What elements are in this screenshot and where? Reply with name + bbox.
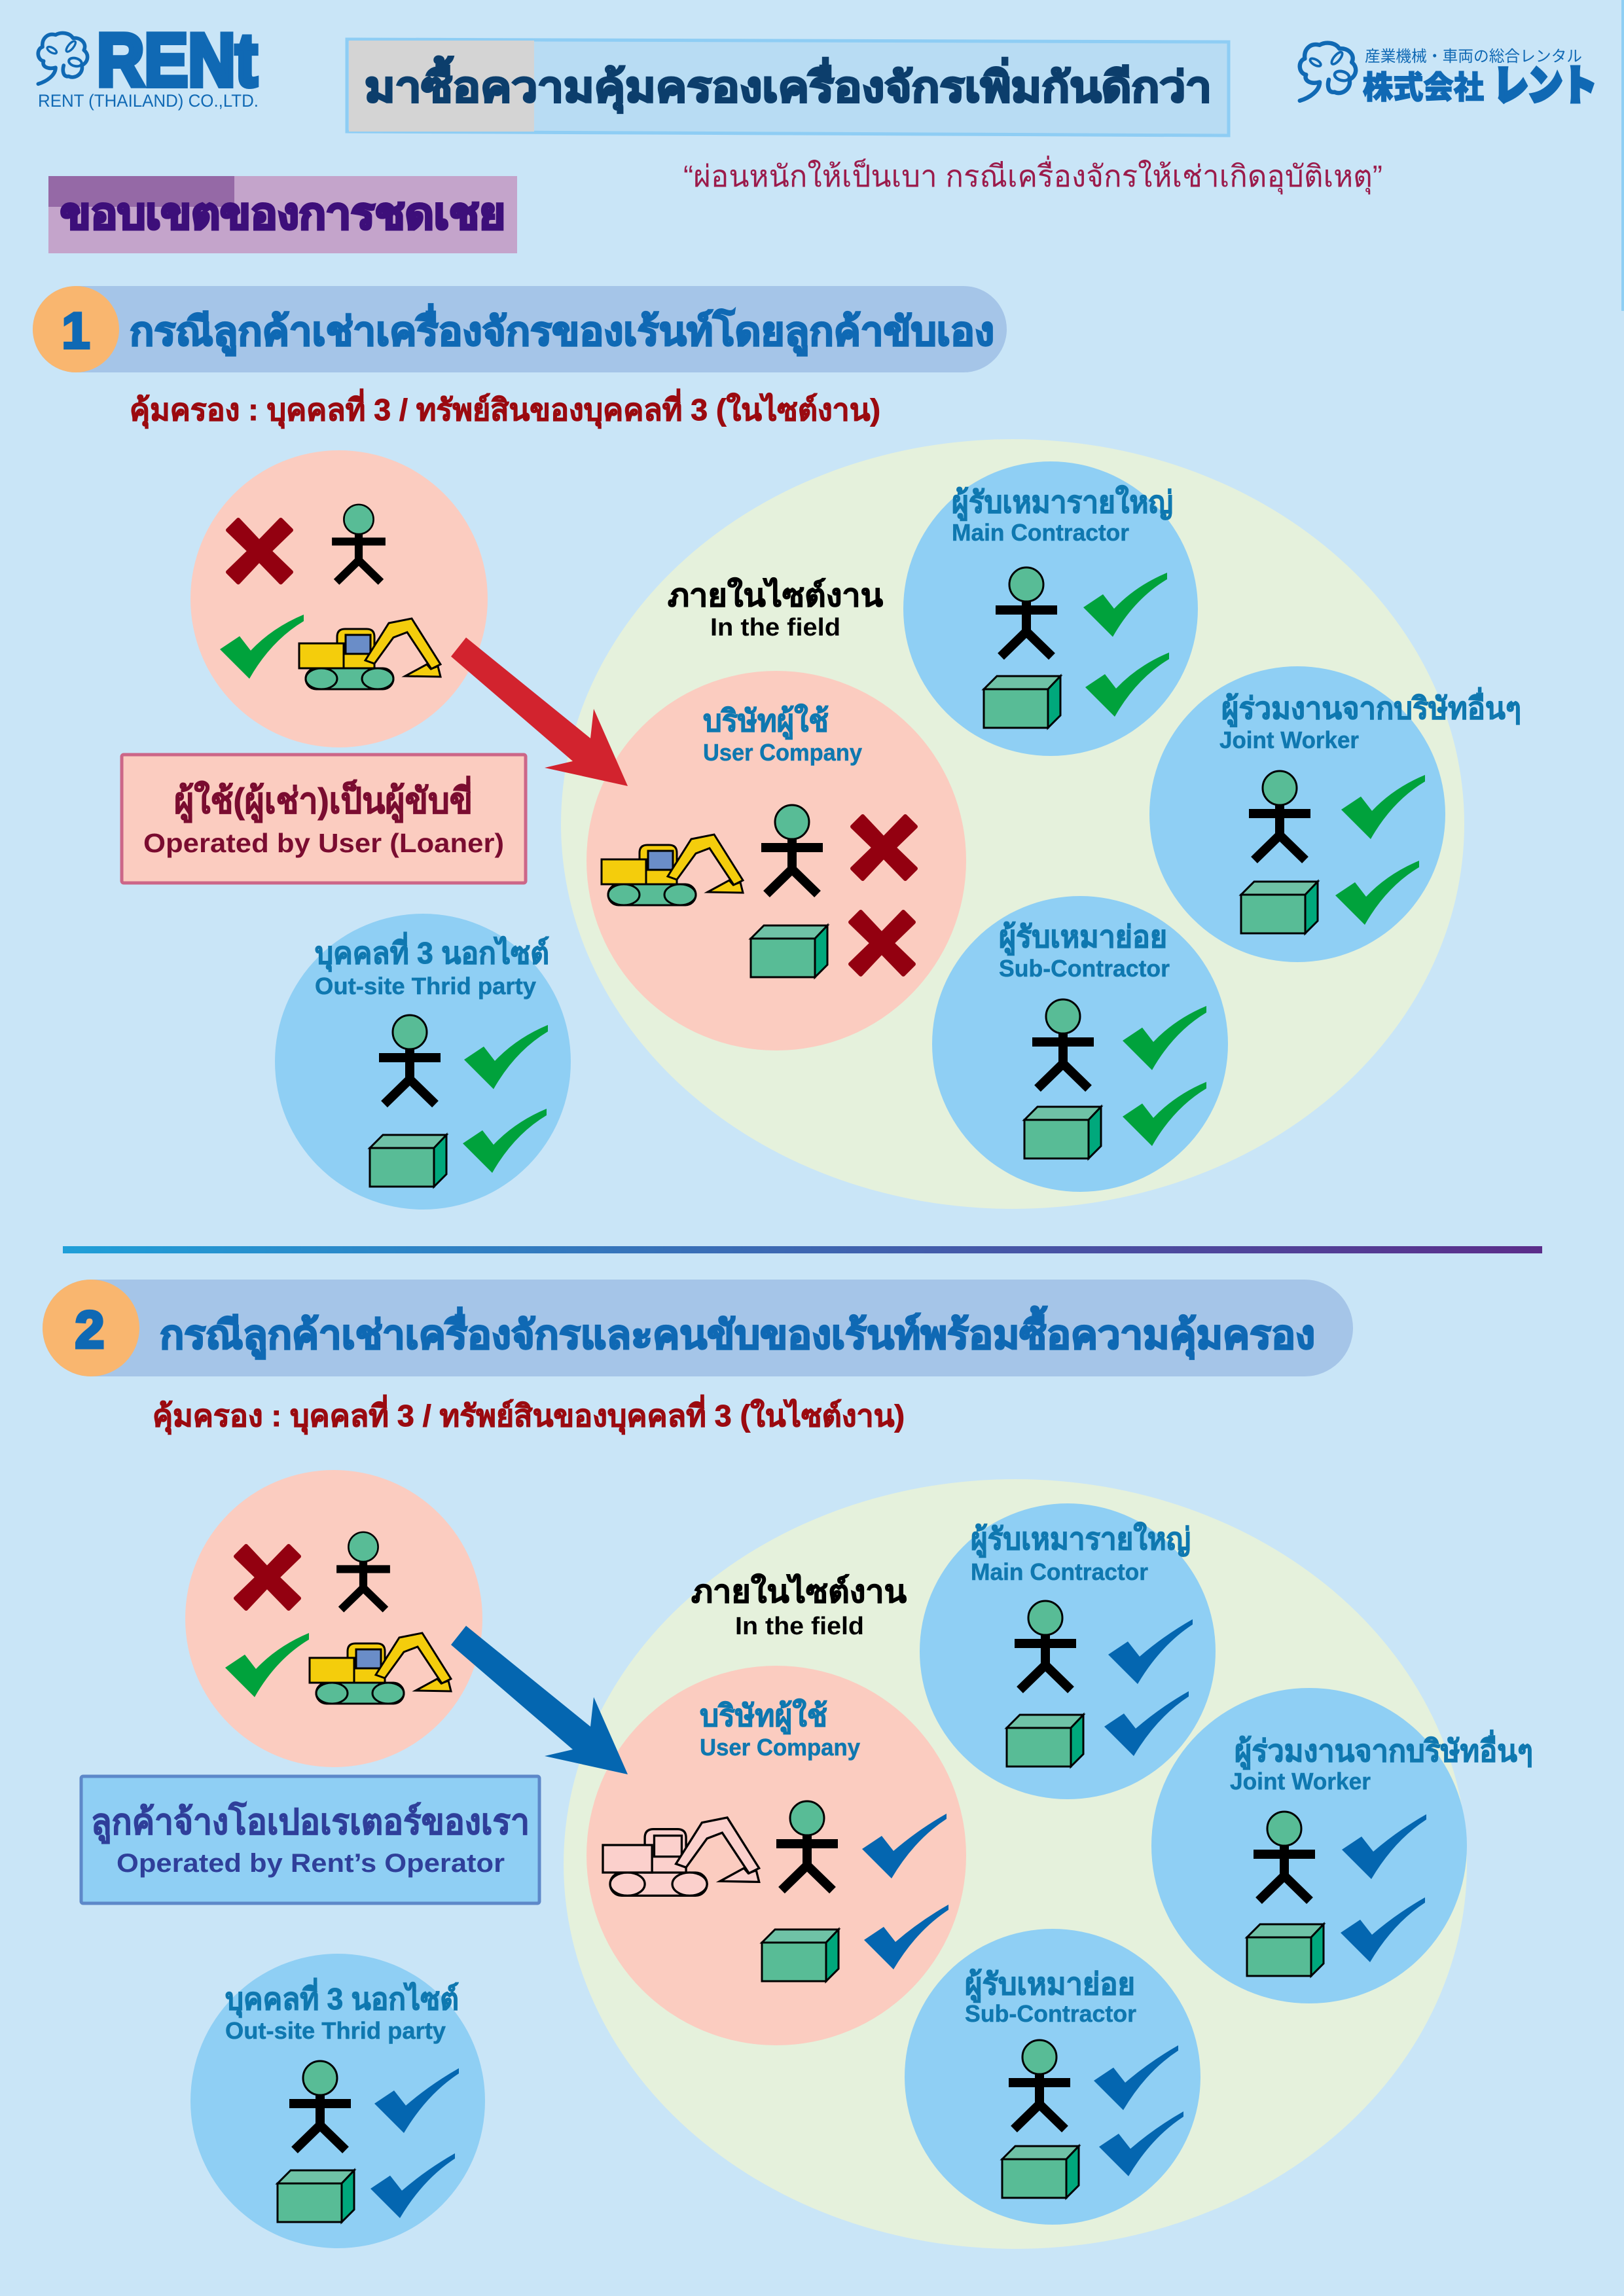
section 2 title: กรณีลูกค้าเช่าเครื่องจักรและคนขับของเร้นท์พร้อมซื้อความคุ้มครอง <box>160 1306 1315 1359</box>
section 2 callout: operated by Rent's operator <box>81 1776 539 1903</box>
field Thai label: ภายในไซต์งาน <box>668 577 883 613</box>
icon: check for machine <box>225 1633 309 1697</box>
icon: box <box>1007 1715 1083 1767</box>
Japanese company name: 株式会社 <box>1363 71 1484 105</box>
logo: RENT Thailand <box>38 19 259 111</box>
icon: check <box>1342 1814 1426 1879</box>
icon: check <box>864 1905 948 1969</box>
heading: scope of compensation <box>48 176 517 253</box>
icon: box <box>370 1135 446 1187</box>
icon: excavator <box>299 619 441 689</box>
section 1 panel: operator conditions <box>190 450 488 747</box>
icon: check <box>1341 775 1425 839</box>
main contractor Thai label: ผู้รับเหมารายใหญ่ <box>971 1521 1191 1558</box>
main contractor English label: Main Contractor <box>971 1558 1148 1585</box>
icon: cross for person <box>852 816 916 879</box>
title banner <box>347 39 1229 135</box>
out-site English label: Out-site Thrid party <box>225 2017 446 2044</box>
icon: person <box>1249 771 1310 860</box>
user company Thai label: บริษัทผู้ใช้ <box>703 703 829 740</box>
section 2 panel: in the field <box>564 1479 1467 2249</box>
icon: check <box>1341 1897 1425 1962</box>
section 2 panel: operator conditions <box>185 1470 482 1767</box>
icon: person <box>1032 999 1094 1088</box>
section 1 circle: joint worker <box>1149 666 1521 962</box>
out-site English label: Out-site Thrid party <box>315 973 536 999</box>
main contractor Thai label: ผู้รับเหมารายใหญ่ <box>952 484 1173 521</box>
icon: check <box>1335 861 1419 925</box>
number badge 1 <box>33 286 119 372</box>
section 2 circle: out-site third party <box>190 1954 485 2248</box>
icon: excavator <box>602 834 743 905</box>
icon: box <box>1241 882 1318 933</box>
icon: check <box>1094 2045 1178 2110</box>
sub-contractor English label: Sub-Contractor <box>999 955 1170 982</box>
icon: cross for person <box>236 1546 299 1609</box>
icon: check <box>464 1025 548 1089</box>
joint worker Thai label: ผู้ร่วมงานจากบริษัทอื่นๆ <box>1221 687 1521 727</box>
icon: flower mark <box>38 33 88 84</box>
section 1 coverage line: คุ้มครอง : บุคคลที่ 3 / ทรัพย์สินของบุคคลที่ 3 (ในไซต์งาน) <box>130 389 880 429</box>
field English label: In the field <box>735 1613 864 1640</box>
user company English label: User Company <box>700 1734 860 1761</box>
field Thai label: ภายในไซต์งาน <box>691 1573 907 1609</box>
out-site Thai label: บุคคลที่ 3 นอกไซต์ <box>225 1978 459 2018</box>
icon: person <box>761 805 823 894</box>
logo company name: RENT (THAILAND) CO.,LTD. <box>38 91 259 111</box>
section 2 circle: joint worker <box>1151 1688 1533 2003</box>
number badge 1: 1 <box>62 302 90 359</box>
section 2 circle: sub-contractor <box>905 1929 1200 2225</box>
callout English text: Operated by Rent’s Operator <box>117 1849 505 1878</box>
icon: check <box>1104 1691 1189 1756</box>
section 2 circle: user company <box>586 1666 966 2045</box>
icon: check <box>1085 653 1169 717</box>
sub-contractor Thai label: ผู้รับเหมาย่อย <box>965 1967 1135 2003</box>
user company Thai label: บริษัทผู้ใช้ <box>700 1698 827 1734</box>
section 2 circle: main contractor <box>920 1503 1216 1799</box>
joint worker English label: Joint Worker <box>1230 1768 1371 1795</box>
section 1 panel: in the field <box>561 439 1464 1209</box>
user company English label: User Company <box>703 739 862 766</box>
section 1 circle: user company <box>586 671 966 1050</box>
icon: person <box>336 1532 390 1609</box>
icon: box <box>1002 2146 1079 2198</box>
icon: check <box>862 1814 947 1878</box>
section 1 title: กรณีลูกค้าเช่าเครื่องจักรของเร้นท์โดยลูกค้าขับเอง <box>130 304 994 356</box>
icon: cross for property <box>850 912 914 975</box>
icon: check for machine <box>220 615 304 679</box>
icon: box <box>751 925 827 977</box>
icon: person <box>1009 2040 1070 2129</box>
icon: check <box>1108 1619 1193 1684</box>
section 2 coverage line: คุ้มครอง : บุคคลที่ 3 / ทรัพย์สินของบุคคลที่ 3 (ในไซต์งาน) <box>153 1395 905 1435</box>
section 1 circle: out-site third party <box>275 914 571 1210</box>
section 2 heading <box>43 1280 1353 1376</box>
icon: check <box>1123 1082 1206 1146</box>
heading text: ขอบเขตของการชดเชย <box>60 189 505 238</box>
joint worker Thai label: ผู้ร่วมงานจากบริษัทอื่นๆ <box>1235 1730 1533 1770</box>
slogan: “ผ่อนหนักให้เป็นเบา กรณีเครื่องจักรให้เช่าเกิดอุบัติเหตุ” <box>683 155 1382 195</box>
section 1 heading <box>33 286 1007 372</box>
joint worker English label: Joint Worker <box>1219 726 1359 753</box>
section 1 arrow <box>451 637 628 786</box>
icon: box <box>1247 1924 1324 1976</box>
title text: มาซื้อความคุ้มครองเครื่องจักรเพิ่มกันดีกว่า <box>365 56 1212 113</box>
Japanese tagline: 産業機械・車両の総合レンタル <box>1365 48 1582 65</box>
icon: excavator <box>310 1633 451 1704</box>
logo: Rent Japan <box>1300 43 1597 109</box>
icon: box <box>1024 1107 1101 1158</box>
Japanese brand name: レント <box>1494 63 1597 109</box>
icon: check <box>374 2068 459 2133</box>
icon: check <box>1123 1006 1206 1070</box>
icon: check <box>463 1109 547 1173</box>
icon: person <box>332 505 386 582</box>
callout Thai text: ลูกค้าจ้างโอเปอเรเตอร์ของเรา <box>91 1801 530 1844</box>
section 2 arrow <box>451 1626 628 1774</box>
icon: person <box>1015 1601 1076 1690</box>
callout English text: Operated by User (Loaner) <box>143 828 504 858</box>
logo wordmark: RENt <box>97 19 257 102</box>
icon: unshaded excavator <box>603 1818 759 1895</box>
field English label: In the field <box>710 614 840 641</box>
main contractor English label: Main Contractor <box>952 519 1129 546</box>
icon: cross for person <box>228 520 291 583</box>
sub-contractor Thai label: ผู้รับเหมาย่อย <box>999 920 1167 956</box>
icon: check <box>1083 573 1167 637</box>
icon: check <box>370 2153 455 2218</box>
icon: box <box>984 676 1060 728</box>
icon: box <box>762 1929 839 1981</box>
sub-contractor English label: Sub-Contractor <box>965 2000 1136 2027</box>
icon: person <box>996 567 1057 656</box>
icon: flower mark Japan <box>1300 43 1356 101</box>
section 1 callout: operated by user <box>122 755 526 883</box>
icon: check <box>1099 2111 1183 2176</box>
callout Thai text: ผู้ใช้(ผู้เช่า)เป็นผู้ขับขี่ <box>174 776 473 823</box>
section 1 circle: sub-contractor <box>932 896 1228 1192</box>
icon: person <box>776 1801 838 1890</box>
number badge 2: 2 <box>75 1300 104 1359</box>
icon: box <box>278 2170 354 2222</box>
number badge 2 <box>43 1280 139 1376</box>
out-site Thai label: บุคคลที่ 3 นอกไซต์ <box>315 932 549 972</box>
section 1 circle: main contractor <box>903 461 1198 756</box>
icon: person <box>1254 1812 1315 1901</box>
icon: person <box>289 2061 351 2150</box>
icon: person <box>379 1015 441 1104</box>
